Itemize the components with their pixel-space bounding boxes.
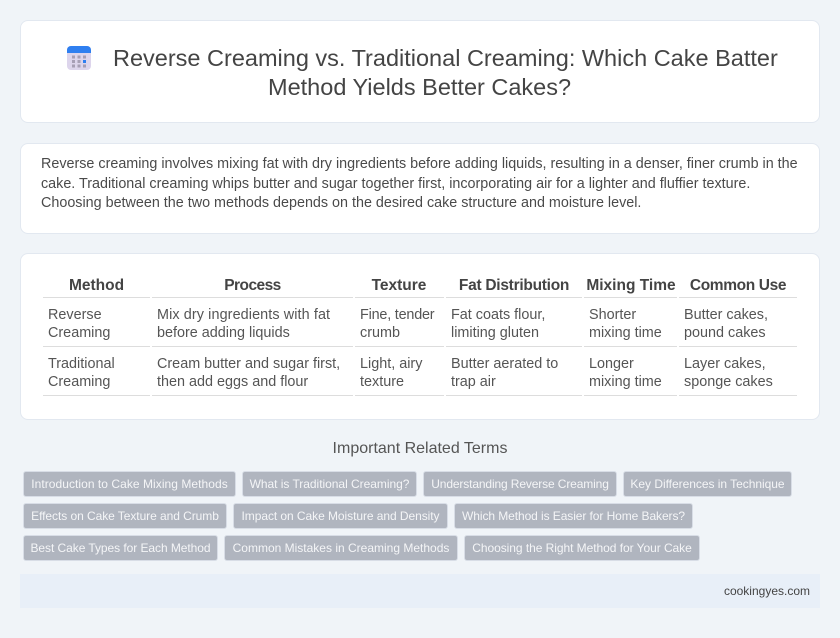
comparison table: Common Use	[690, 277, 786, 294]
comparison table: before adding liquids	[157, 325, 290, 341]
comparison table: Mixing Time	[586, 277, 676, 294]
comparison table: Reverse	[48, 307, 102, 323]
intro text: Choosing between the two methods depends on the desired cake structure and moisture level.	[41, 195, 641, 211]
comparison table: Longer	[589, 356, 634, 372]
intro text: cake. Traditional creaming whips butter and sugar together first, incorporating air for a lighter and fluffier texture.	[41, 176, 750, 192]
related term tags: What is Traditional Creaming?	[250, 477, 409, 491]
comparison table: mixing time	[589, 325, 662, 341]
related term tags: Effects on Cake Texture and Crumb	[31, 509, 219, 523]
related term tags: Best Cake Types for Each Method	[30, 541, 210, 555]
comparison table: crumb	[360, 325, 400, 341]
comparison table: Butter aerated to	[451, 356, 558, 372]
comparison table: mixing time	[589, 374, 662, 390]
intro text	[41, 156, 798, 211]
intro text: Reverse creaming involves mixing fat with dry ingredients before adding liquids, resulting in a denser, finer crumb in the	[41, 156, 798, 172]
intro panel	[20, 143, 820, 234]
related term tags: Understanding Reverse Creaming	[431, 477, 609, 491]
comparison table: then add eggs and flour	[157, 374, 308, 390]
related term tags: Impact on Cake Moisture and Density	[242, 509, 440, 523]
related term tags	[23, 471, 792, 561]
comparison table: Fat Distribution	[459, 277, 569, 294]
title: Reverse Creaming vs. Traditional Creaming: Which Cake Batter	[113, 45, 778, 71]
comparison table: Creaming	[48, 374, 110, 390]
related term tags: Common Mistakes in Creaming Methods	[233, 541, 449, 555]
footer bar: cookingyes.com	[724, 584, 810, 598]
comparison table: Shorter	[589, 307, 636, 323]
title	[113, 45, 778, 100]
comparison table: Butter cakes,	[684, 307, 768, 323]
comparison table: Method	[69, 277, 124, 294]
header panel	[20, 20, 820, 123]
comparison table: texture	[360, 374, 404, 390]
related term tags: Introduction to Cake Mixing Methods	[31, 477, 228, 491]
related terms heading: Important Related Terms	[333, 440, 507, 457]
comparison table: Process	[224, 277, 281, 294]
comparison table: Fat coats flour,	[451, 307, 545, 323]
comparison table: limiting gluten	[451, 325, 539, 341]
comparison table: trap air	[451, 374, 496, 390]
related term tags: Which Method is Easier for Home Bakers?	[462, 509, 685, 523]
comparison table: Layer cakes,	[684, 356, 766, 372]
comparison table: Texture	[372, 277, 426, 294]
comparison table: Cream butter and sugar first,	[157, 356, 340, 372]
comparison table	[43, 277, 797, 396]
comparison table: pound cakes	[684, 325, 766, 341]
icon: calendar	[67, 46, 91, 70]
comparison table: Light, airy	[360, 356, 422, 372]
related term tags: Choosing the Right Method for Your Cake	[472, 541, 692, 555]
comparison table: sponge cakes	[684, 374, 773, 390]
table panel	[20, 253, 820, 420]
related term tags: Key Differences in Technique	[630, 477, 785, 491]
comparison table: Traditional	[48, 356, 115, 372]
comparison table: Creaming	[48, 325, 110, 341]
comparison table: Fine, tender	[360, 307, 434, 323]
comparison table: Mix dry ingredients with fat	[157, 307, 330, 323]
footer bar	[20, 574, 820, 608]
title: Method Yields Better Cakes?	[268, 74, 571, 100]
